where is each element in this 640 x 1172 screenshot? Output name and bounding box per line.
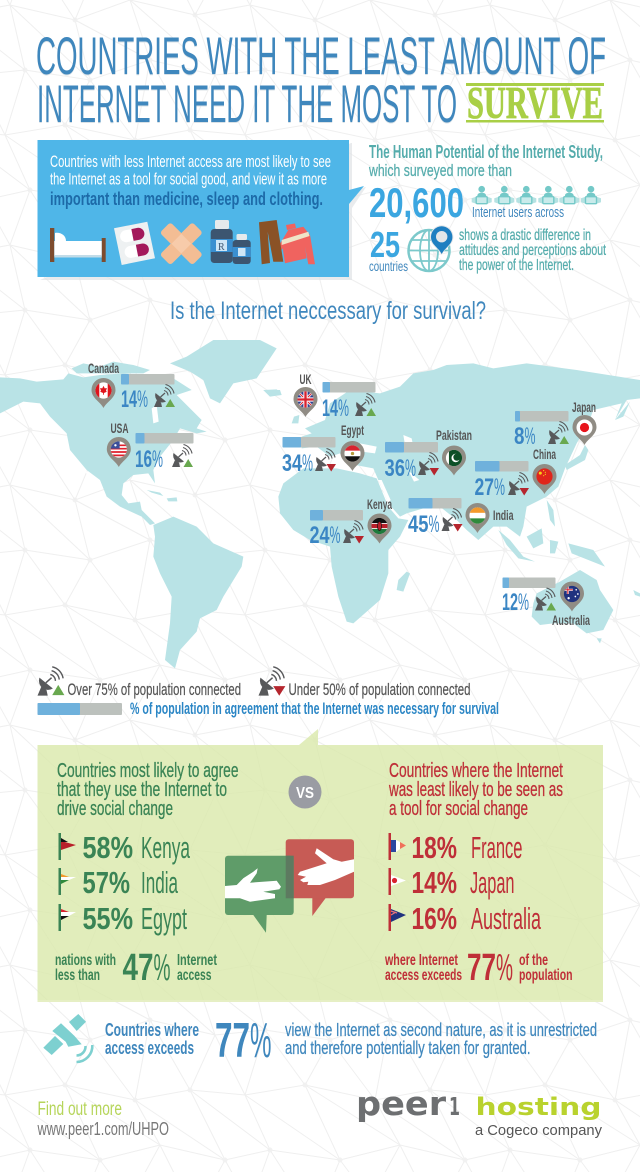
takeaway text — [285, 1019, 597, 1058]
country: UK — [294, 374, 376, 417]
row: Australia 16% — [388, 901, 541, 936]
row: Australia 16%: 16% — [412, 901, 457, 936]
row: Egypt 55%: Egypt — [141, 901, 187, 936]
country: Japan: 8 — [514, 423, 524, 450]
stat: 20,600 internet users: Internet users across — [472, 204, 564, 221]
icon: bed — [50, 228, 106, 262]
row: France 18%: France — [471, 830, 522, 865]
country: India: % — [428, 511, 440, 538]
intro text: important than medicine, sleep and clothing. — [50, 189, 323, 209]
intro text: the Internet as a tool for social good, and view it as more — [50, 170, 327, 188]
legend — [38, 667, 499, 718]
country: India: India — [493, 507, 514, 523]
pin: India flag — [466, 503, 490, 533]
footer link — [37, 1099, 169, 1139]
title — [36, 27, 606, 134]
right footnote: 77 — [467, 947, 496, 989]
row: India 57% — [58, 865, 178, 900]
icon: handshake speech bubbles — [225, 839, 354, 933]
country: Egypt: Egypt — [341, 422, 364, 438]
intro text: Countries with less Internet access are most likely to see — [50, 153, 331, 171]
takeaway: countries where access exceeds: Countries where — [105, 1020, 199, 1040]
left footnote — [55, 947, 217, 989]
country: Canada: % — [137, 386, 148, 413]
icon: bandage — [160, 222, 203, 265]
row: Egypt 55%: 55% — [82, 901, 133, 936]
vs badge: VS — [296, 785, 314, 802]
row: Kenya 58% — [58, 830, 190, 865]
icon: globe with pin — [408, 225, 453, 271]
country: UK: 14 — [322, 395, 338, 422]
left footnote: 47 — [122, 947, 154, 989]
row: Japan 14%: 14% — [412, 865, 457, 900]
country: Japan: % — [524, 423, 536, 450]
right footnote: population — [519, 967, 572, 984]
country: Japan: Japan — [572, 399, 596, 415]
icon: medicine bottles — [211, 220, 251, 264]
country: USA: 16 — [135, 446, 152, 473]
row: Kenya 58%: Kenya — [141, 830, 190, 865]
country: UK: UK — [300, 371, 312, 387]
country: USA: USA — [110, 420, 128, 436]
country: USA: % — [152, 446, 163, 473]
icon: trousers — [259, 220, 283, 264]
pin: USA flag — [107, 437, 131, 467]
left heading: drive social change — [57, 797, 173, 820]
right footnote — [384, 947, 572, 989]
country: Kenya: Kenya — [367, 496, 392, 512]
right footnote: access exceeds — [385, 967, 462, 984]
stat: 25 countries: 25 — [370, 224, 400, 265]
country: USA — [106, 424, 194, 467]
logo: peer1 hosting: a Cogeco company — [475, 1122, 602, 1139]
row: Japan 14%: Japan — [470, 865, 514, 900]
left footnote: access — [177, 967, 212, 984]
right heading: Countries where the Internet — [389, 759, 563, 782]
country: Australia — [502, 578, 590, 628]
legend: over 75% — [38, 667, 241, 699]
pin: Pakistan flag — [442, 446, 466, 476]
row: India 57%: India — [141, 865, 178, 900]
study description — [459, 227, 606, 274]
legend: over 75%: Over 75% of population connected — [68, 681, 241, 699]
country: Australia: % — [518, 589, 529, 616]
country: Australia: Australia — [552, 612, 590, 628]
study text: which surveyed more than — [368, 161, 512, 180]
country: China: China — [533, 446, 556, 462]
stat: 20,600 internet users: 20,600 — [369, 179, 464, 226]
country: Pakistan: Pakistan — [436, 427, 472, 443]
takeaway: countries where access exceeds: access exceeds — [105, 1038, 194, 1058]
pin: Canada flag — [92, 378, 116, 408]
country: Pakistan — [385, 430, 472, 476]
takeaway: countries where access exceeds — [105, 1020, 199, 1058]
panel: intro callout — [38, 140, 366, 280]
country: Kenya — [310, 500, 392, 544]
pin: Kenya flag — [368, 514, 392, 544]
country: Pakistan: 36 — [384, 455, 405, 482]
country: Canada: 14 — [121, 386, 137, 413]
pin: Japan flag — [572, 415, 596, 445]
country: Canada — [88, 363, 175, 408]
country: Canada: Canada — [88, 360, 119, 376]
right footnote: % — [496, 947, 513, 989]
icon: sweater — [277, 224, 315, 264]
country: Egypt — [282, 426, 364, 472]
legend: under 50% — [258, 667, 470, 699]
left heading: Countries most likely to agree — [57, 759, 238, 782]
footer link: Find out more — [38, 1099, 122, 1120]
logo: peer1 hosting: hosting — [476, 1093, 602, 1121]
row: India 57%: 57% — [82, 865, 130, 900]
row: Australia 16%: Australia — [471, 901, 541, 936]
stat: 25 countries: countries — [369, 258, 408, 274]
study text — [368, 142, 603, 180]
icon: users with laptops — [472, 186, 601, 204]
row: Egypt 55% — [58, 901, 187, 936]
country: Kenya: % — [330, 522, 340, 549]
row: France 18%: 18% — [412, 830, 457, 865]
logo: peer1 hosting: 1 — [449, 1092, 460, 1121]
pin: Australia flag — [560, 582, 584, 612]
logo: peer1 hosting: peer — [356, 1084, 447, 1123]
country: Egypt: 34 — [282, 450, 302, 477]
left footnote: less than — [55, 967, 100, 984]
footer link: www.peer1.com/UHPO — [37, 1119, 169, 1139]
right footnote: where Internet — [384, 952, 458, 969]
pin: UK flag — [294, 387, 318, 417]
country: India: 45 — [408, 511, 428, 538]
right heading — [388, 759, 563, 820]
country: Japan — [514, 399, 596, 450]
row: France 18% — [388, 830, 522, 865]
country: Australia: 12 — [502, 589, 518, 616]
world map — [0, 340, 640, 668]
logo: peer1 hosting — [356, 1084, 602, 1139]
panel: comparison — [38, 729, 603, 1002]
heading: map question: Is the Internet neccessary for survival? — [170, 297, 486, 325]
row: Japan 14% — [388, 865, 514, 900]
text: % — [250, 1014, 272, 1068]
icon: satellite — [43, 1014, 92, 1062]
country: China: 27 — [474, 474, 494, 501]
study description: the power of the Internet. — [459, 257, 574, 274]
intro text — [50, 153, 331, 209]
stat: 20,600 internet users — [369, 179, 601, 226]
stat: 77%: 77 — [215, 1014, 250, 1068]
left heading — [57, 759, 238, 820]
legend: under 50%: Under 50% of population connected — [288, 681, 470, 699]
country: Pakistan: % — [405, 455, 416, 482]
left heading: that they use the Internet to — [57, 778, 227, 801]
country: India — [408, 498, 514, 533]
left footnote: Internet — [177, 952, 217, 969]
vs badge — [288, 776, 322, 808]
right heading: a tool for social change — [389, 797, 528, 820]
country: China — [474, 446, 556, 501]
pin: China flag — [532, 464, 556, 494]
icon: pills — [114, 222, 155, 265]
pin: Egypt flag — [340, 441, 364, 471]
country: UK: % — [338, 395, 349, 422]
legend: bar — [38, 700, 499, 718]
left footnote: nations with — [55, 952, 116, 969]
takeaway text: and therefore potentially taken for granted. — [285, 1037, 530, 1058]
row: Kenya 58%: 58% — [82, 830, 133, 865]
country: Egypt: % — [302, 450, 313, 477]
left footnote: % — [154, 947, 170, 989]
right footnote: of the — [519, 952, 548, 969]
icon: medicine bottles: R — [218, 242, 225, 253]
country: Kenya: 24 — [310, 522, 330, 549]
country: China: % — [494, 474, 505, 501]
